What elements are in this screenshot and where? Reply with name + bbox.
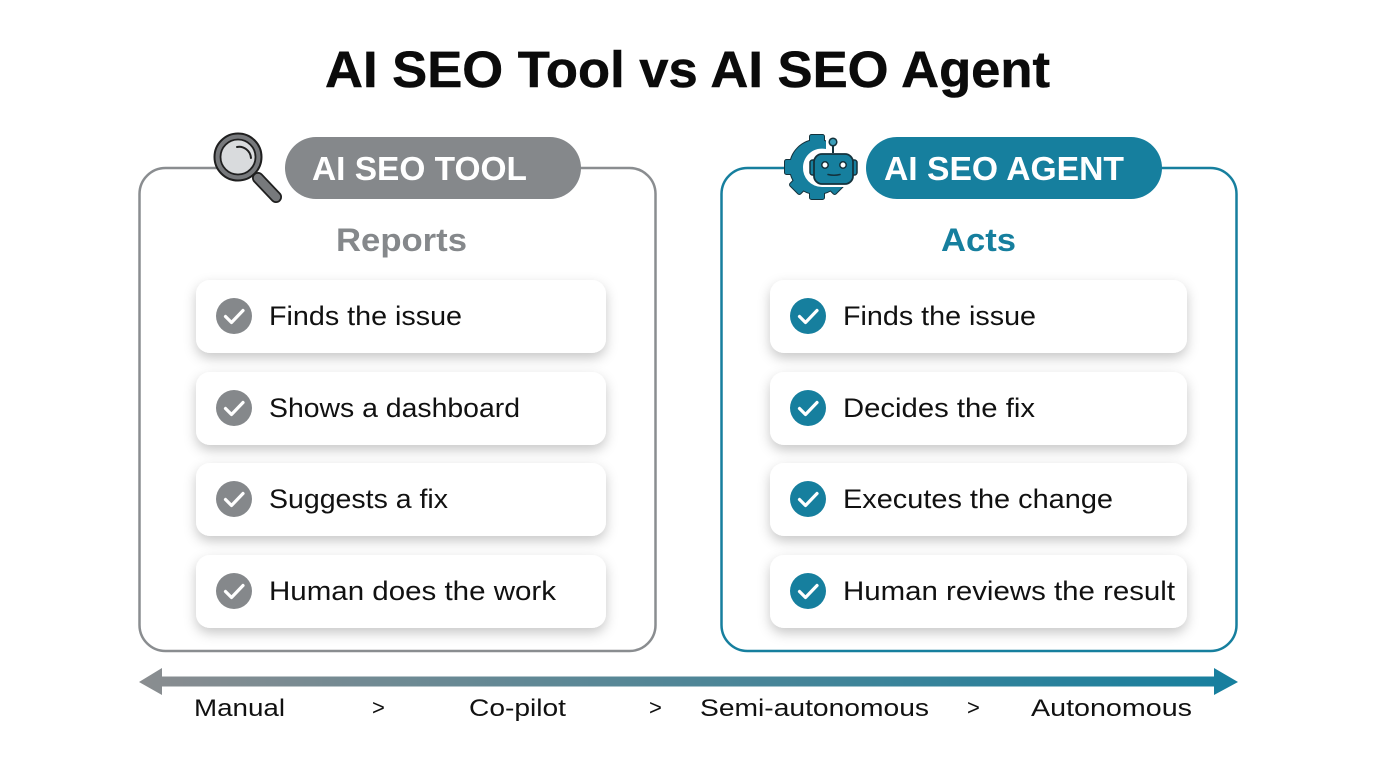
item: Executes the change (770, 463, 1187, 536)
separator: > (967, 695, 980, 720)
label: Co-pilot: Co-pilot (469, 695, 566, 722)
gear cutout (803, 128, 862, 187)
badge: AI SEO AGENT (866, 137, 1162, 199)
item: Human does the work (196, 555, 606, 628)
item: Suggests a fix (196, 463, 606, 536)
item: Finds the issue (770, 280, 1187, 353)
item: Suggests a fix: Suggests a fix (269, 484, 449, 514)
item: Human reviews the result (770, 555, 1187, 628)
label: Autonomous: Autonomous (1031, 695, 1192, 722)
badge: AI SEO AGENT: AI SEO AGENT (884, 150, 1124, 187)
gear fill layer (785, 135, 849, 199)
spectrum labels (194, 695, 1192, 722)
separator: > (649, 695, 662, 720)
item: Finds the issue (196, 280, 606, 353)
item: Decides the fix (770, 372, 1187, 445)
item: Human reviews the result: Human reviews the result (843, 576, 1176, 606)
badge: AI SEO TOOL: AI SEO TOOL (312, 150, 527, 187)
panel: AI SEO Tool (140, 130, 656, 651)
heading: Reports: Reports (336, 222, 467, 258)
label: Semi-autonomous: Semi-autonomous (700, 695, 929, 722)
panel: AI SEO Agent (722, 128, 1236, 651)
item: Decides the fix: Decides the fix (843, 393, 1036, 423)
arrow: autonomy spectrum (139, 668, 1238, 695)
icon: robot gear (785, 128, 868, 199)
title: AI SEO Tool vs AI SEO Agent (325, 41, 1050, 98)
icon: magnifying glass (214, 130, 285, 197)
item: Executes the change: Executes the change (843, 484, 1113, 514)
label: Manual: Manual (194, 695, 285, 722)
badge: AI SEO TOOL (285, 137, 581, 199)
item: Shows a dashboard: Shows a dashboard (269, 393, 520, 423)
gear outline layer (785, 135, 849, 199)
separator: > (372, 695, 385, 720)
heading: Acts: Acts (941, 222, 1016, 258)
item: Human does the work: Human does the work (269, 576, 557, 606)
item: Shows a dashboard (196, 372, 606, 445)
item: Finds the issue: Finds the issue (843, 301, 1036, 331)
item: Finds the issue: Finds the issue (269, 301, 462, 331)
